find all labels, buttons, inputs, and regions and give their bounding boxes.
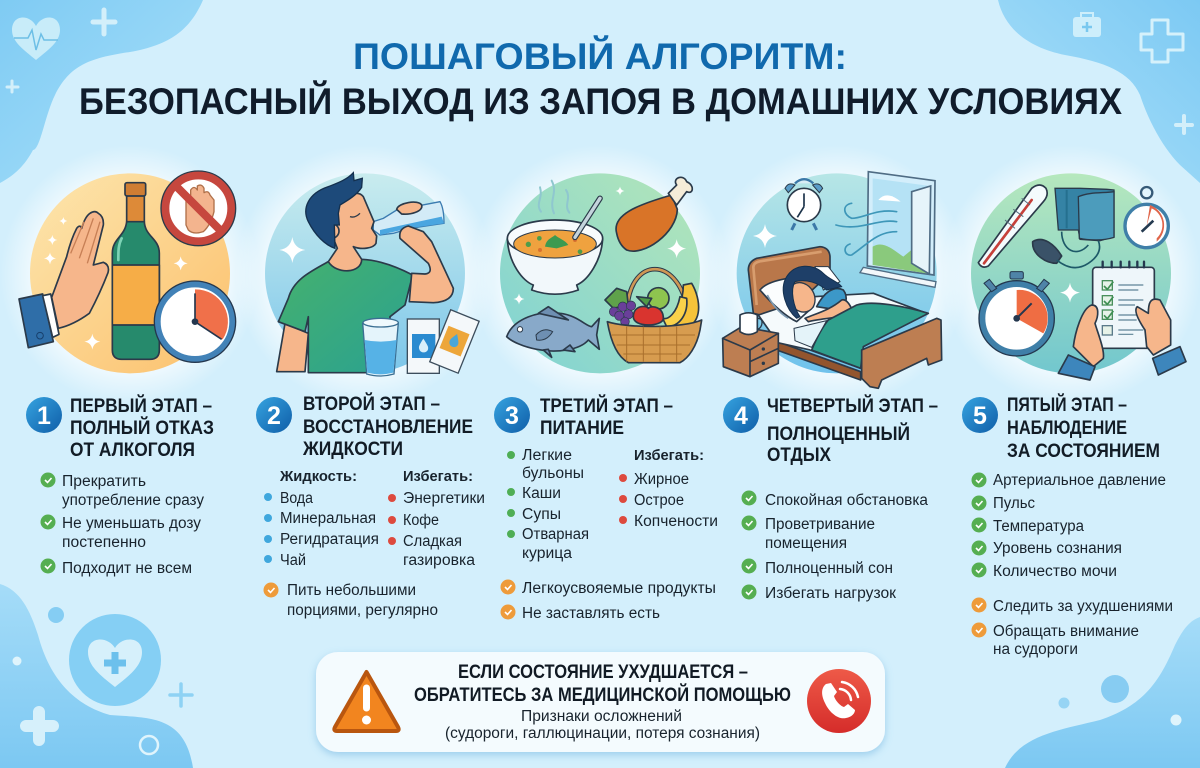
tips 5: на судороги xyxy=(993,641,1078,658)
list: avoid drinks: Избегать: xyxy=(403,468,473,485)
list: avoid drinks: газировка xyxy=(403,552,475,569)
list 5: Температура xyxy=(993,518,1084,535)
icon: heart with cross in circle xyxy=(69,614,161,706)
list: food: курица xyxy=(522,545,572,562)
list 1: постепенно xyxy=(62,534,146,551)
panel: step 3 xyxy=(494,395,718,622)
heading 2: ВОССТАНОВЛЕНИЕ xyxy=(303,417,473,438)
list: food: бульоны xyxy=(522,465,584,482)
banner text: Признаки осложнений xyxy=(521,708,682,725)
icon: phone xyxy=(807,669,871,733)
heading 1: ОТ АЛКОГОЛЯ xyxy=(70,440,195,461)
panel: step 2 xyxy=(256,393,485,619)
list: avoid food: Острое xyxy=(634,492,684,509)
list: liquids: Чай xyxy=(280,552,306,569)
icon: outline cross xyxy=(1141,20,1183,62)
heading 5 xyxy=(1007,394,1160,462)
badge 3 xyxy=(494,397,530,433)
decorative dots bottom left xyxy=(12,607,192,754)
heading 4: ПОЛНОЦЕННЫЙ xyxy=(767,423,910,445)
illustration: drinking water xyxy=(265,173,479,376)
heading 4: ОТДЫХ xyxy=(767,445,831,466)
icon: warning triangle xyxy=(334,672,399,731)
heading 2: ЖИДКОСТИ xyxy=(302,439,403,460)
list 4 xyxy=(742,490,928,602)
icon: plus top left xyxy=(93,10,115,34)
tips 5: Обращать внимание xyxy=(993,623,1139,640)
panel: step 1 xyxy=(26,395,214,577)
callout: warning banner xyxy=(316,652,885,752)
list 1: Прекратить xyxy=(62,473,146,490)
title xyxy=(79,35,1122,122)
illustration: food xyxy=(500,173,702,373)
list 1 xyxy=(40,472,204,577)
list 1: Подходит не всем xyxy=(62,560,192,577)
heading 2 xyxy=(302,393,473,460)
decorative dots bottom right xyxy=(1058,675,1182,726)
list: avoid drinks: Кофе xyxy=(403,512,439,529)
illustration: monitoring xyxy=(971,173,1186,380)
icon: medical case xyxy=(1073,13,1101,37)
heading 2: ВТОРОЙ ЭТАП – xyxy=(303,393,440,415)
heading 3: ТРЕТИЙ ЭТАП – xyxy=(540,395,673,417)
list 5: Артериальное давление xyxy=(993,472,1166,489)
tips 5: Следить за ухудшениями xyxy=(993,598,1173,615)
badge 4 xyxy=(723,397,759,433)
heading 1: ПЕРВЫЙ ЭТАП – xyxy=(70,395,212,417)
list: food: Каши xyxy=(522,485,561,502)
list 4: Спокойная обстановка xyxy=(765,492,928,509)
illustration: rest xyxy=(723,172,942,388)
tips 3 xyxy=(500,580,716,622)
heading 3 xyxy=(540,395,673,439)
bed xyxy=(748,247,830,320)
banner text: (судороги, галлюцинации, потеря сознания) xyxy=(445,725,760,742)
heading 4: ЧЕТВЕРТЫЙ ЭТАП – xyxy=(767,395,938,417)
heading 4 xyxy=(767,395,938,466)
list 1: употребление сразу xyxy=(62,492,204,509)
list 5: Уровень сознания xyxy=(993,540,1122,557)
badge 1 xyxy=(26,397,62,433)
badge 5: 5 xyxy=(973,402,987,430)
list 5: Пульс xyxy=(993,495,1035,512)
tip 2: порциями, регулярно xyxy=(287,602,438,619)
banner text xyxy=(414,662,791,742)
illustration: refusing alcohol xyxy=(19,171,236,373)
list: food: Супы xyxy=(522,506,561,523)
list: avoid food: Копчености xyxy=(634,513,718,530)
list 4: Полноценный сон xyxy=(765,560,893,577)
banner text: ЕСЛИ СОСТОЯНИЕ УХУДШАЕТСЯ – xyxy=(458,662,748,683)
icon: small plus right xyxy=(1176,116,1192,133)
badge 3: 3 xyxy=(505,402,519,430)
badge 2: 2 xyxy=(267,402,281,430)
icon: heart with pulse xyxy=(12,17,60,60)
list: food: Легкие xyxy=(522,447,572,464)
list: liquids xyxy=(264,468,379,569)
tip 2 xyxy=(264,582,438,619)
list 4: помещения xyxy=(765,535,847,552)
list 5 xyxy=(972,472,1166,580)
heading 1 xyxy=(70,395,214,461)
heading 5: НАБЛЮДЕНИЕ xyxy=(1007,418,1127,439)
list: liquids: Вода xyxy=(280,490,313,507)
list: avoid drinks: Энергетики xyxy=(403,490,485,507)
heading 3: ПИТАНИЕ xyxy=(540,418,624,439)
heading 5: ЗА СОСТОЯНИЕМ xyxy=(1007,441,1160,462)
tips 5 xyxy=(972,598,1173,658)
list: liquids: Минеральная xyxy=(280,510,376,527)
title: ПОШАГОВЫЙ АЛГОРИТМ: xyxy=(353,35,847,77)
list: avoid drinks: Сладкая xyxy=(403,533,462,550)
list: food xyxy=(507,447,589,562)
icon: plus bottom left xyxy=(26,712,53,740)
list: avoid drinks xyxy=(388,468,485,569)
tip 2: Пить небольшими xyxy=(287,582,416,599)
banner text: ОБРАТИТЕСЬ ЗА МЕДИЦИНСКОЙ ПОМОЩЬЮ xyxy=(414,684,791,706)
list 4: Избегать нагрузок xyxy=(765,585,896,602)
list: liquids: Жидкость: xyxy=(279,468,357,485)
list: avoid food: Избегать: xyxy=(634,447,704,464)
badge 2 xyxy=(256,397,292,433)
heading 5: ПЯТЫЙ ЭТАП – xyxy=(1007,394,1127,416)
list 5: Количество мочи xyxy=(993,563,1117,580)
panel: step 5 xyxy=(962,394,1173,658)
list: food: Отварная xyxy=(522,526,589,543)
list: avoid food: Жирное xyxy=(634,471,689,488)
list: avoid food xyxy=(619,447,718,530)
panel: step 4 xyxy=(723,395,938,602)
list: liquids: Регидратация xyxy=(280,531,379,548)
heading 1: ПОЛНЫЙ ОТКАЗ xyxy=(70,417,214,439)
list 4: Проветривание xyxy=(765,516,875,533)
tips 3: Легкоусвояемые продукты xyxy=(522,580,716,597)
list 1: Не уменьшать дозу xyxy=(62,515,201,532)
icon: small plus left xyxy=(7,81,18,92)
badge 1: 1 xyxy=(37,402,51,430)
badge 5 xyxy=(962,397,998,433)
badge 4: 4 xyxy=(734,402,748,430)
title: БЕЗОПАСНЫЙ ВЫХОД ИЗ ЗАПОЯ В ДОМАШНИХ УСЛОВИЯХ xyxy=(79,80,1122,122)
tips 3: Не заставлять есть xyxy=(522,605,660,622)
